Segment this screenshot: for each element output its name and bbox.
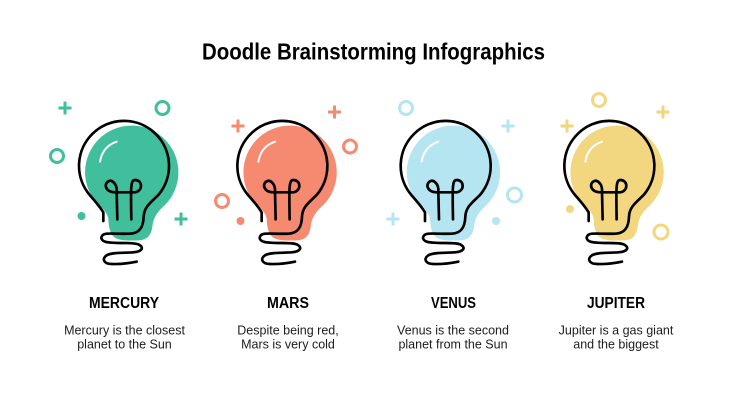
panel: jupiter bbox=[559, 94, 674, 352]
text: mercury description: planet to the Sun bbox=[77, 338, 172, 352]
icon: jupiter light bulb bbox=[564, 121, 664, 264]
icon: mercury light bulb bbox=[79, 121, 178, 264]
icon: venus ring right bbox=[508, 188, 522, 202]
heading: mercury: MERCURY bbox=[89, 295, 159, 312]
heading: mars: MARS bbox=[267, 295, 309, 312]
icon: mercury ring top right bbox=[156, 102, 169, 114]
icon: mars plus top right bbox=[328, 106, 341, 118]
text: jupiter description: and the biggest bbox=[573, 338, 659, 352]
heading: venus: VENUS bbox=[431, 295, 476, 312]
text: mars description: Despite being red, bbox=[237, 324, 339, 338]
icon: venus light bulb bbox=[401, 121, 500, 264]
icon: mars plus top left bbox=[232, 120, 244, 132]
icon: venus plus left bbox=[386, 212, 400, 226]
heading: jupiter: JUPITER bbox=[587, 295, 645, 312]
icon: jupiter ring top bbox=[592, 94, 606, 106]
panel: mars bbox=[216, 106, 356, 352]
icon: venus ring top left bbox=[400, 102, 412, 114]
icon: jupiter ring bottom bbox=[654, 225, 668, 239]
icon: mars ring left bbox=[216, 194, 228, 208]
title: Doodle Brainstorming Infographics bbox=[202, 38, 545, 64]
text: jupiter description: Jupiter is a gas giant bbox=[559, 324, 674, 338]
panel: venus bbox=[386, 102, 522, 352]
icon: jupiter plus left bbox=[560, 120, 574, 132]
icon: mercury plus top left bbox=[58, 102, 72, 114]
icon: mercury plus bottom right bbox=[174, 212, 188, 226]
text: mars description: Mars is very cold bbox=[241, 338, 335, 352]
icon: mercury ring left bbox=[50, 150, 64, 162]
icon: venus dot bbox=[492, 217, 500, 225]
icon: mars light bulb bbox=[237, 121, 337, 264]
panel: mercury bbox=[50, 102, 188, 352]
icon: mars dot bbox=[236, 217, 244, 225]
text: venus description: Venus is the second bbox=[397, 324, 509, 338]
text: mercury description: Mercury is the closest bbox=[64, 324, 185, 338]
icon: venus plus top right bbox=[502, 120, 514, 132]
text: venus description: planet from the Sun bbox=[398, 338, 508, 352]
icon: jupiter plus right bbox=[656, 106, 670, 118]
icon: mars ring right bbox=[344, 140, 356, 153]
icon: mercury dot bbox=[78, 212, 86, 220]
icon: jupiter dot bbox=[566, 205, 574, 213]
